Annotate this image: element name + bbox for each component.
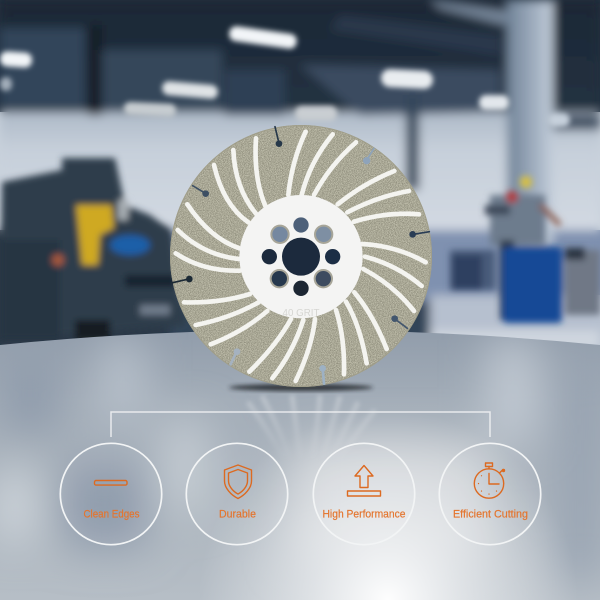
disc shadow [229, 384, 373, 391]
feature: clean edges [60, 443, 162, 545]
label: durable: Durable [219, 508, 256, 520]
background barrel and equipment [450, 176, 600, 323]
disc cooling ribs [176, 132, 426, 381]
label: high performance: High Performance [322, 508, 406, 520]
background: blurred factory interior [0, 0, 600, 350]
disc white hub [239, 195, 363, 318]
connector bracket [111, 412, 490, 437]
icon: shield [224, 465, 252, 498]
background ceiling lights [0, 25, 570, 127]
feature: high performance [313, 443, 415, 545]
icon: stopwatch [474, 463, 504, 498]
icon: upward arrow on tray [348, 466, 380, 496]
diamond cutting disc [170, 125, 432, 387]
background machine [0, 158, 185, 340]
label: clean edges: Clean Edges [84, 508, 140, 520]
disc slots [173, 127, 429, 384]
hub holes [262, 217, 340, 296]
metal table surface [0, 315, 600, 600]
label: efficient cutting: Efficient Cutting [453, 508, 528, 520]
hub text: 40 GRIT [282, 308, 320, 319]
feature: efficient cutting [439, 443, 541, 545]
icon: flat edge bar [94, 480, 127, 485]
disc reflection [247, 394, 375, 432]
feature: durable [186, 443, 288, 545]
